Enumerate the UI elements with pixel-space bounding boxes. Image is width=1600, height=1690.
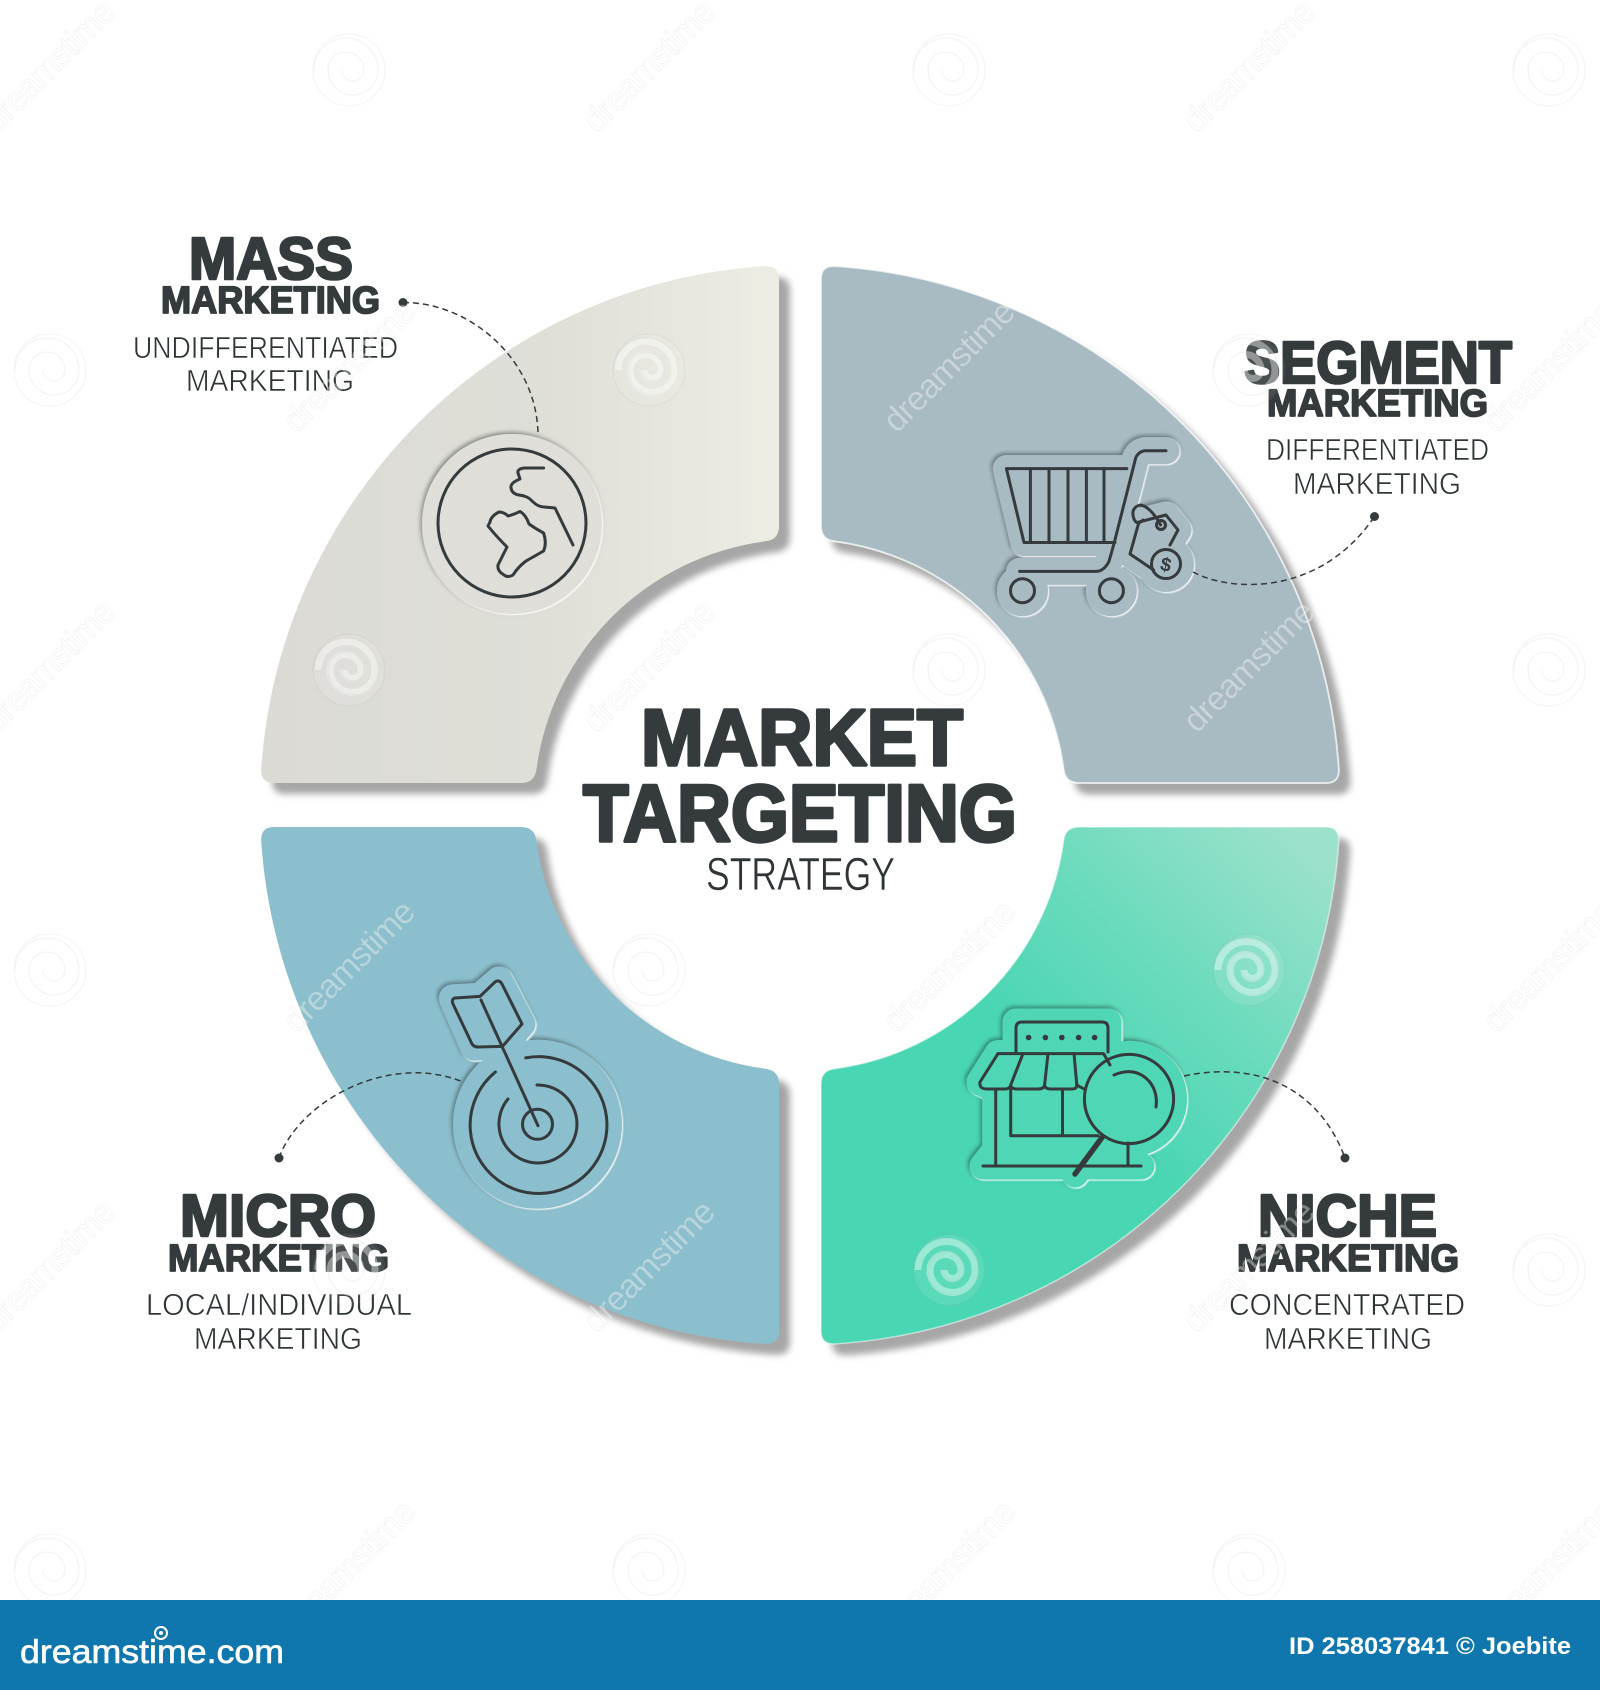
watermark: dreamstime text: dreamstime — [876, 893, 1023, 1040]
label: segment marketing: MARKETING — [1293, 466, 1461, 501]
title: market targeting strategy — [583, 693, 1017, 900]
watermark: dreamstime text: dreamstime — [1176, 593, 1323, 740]
label: mass marketing: UNDIFFERENTIATED — [133, 330, 398, 365]
panel: mass marketing quadrant — [261, 266, 779, 783]
label: segment marketing: MARKETING — [1267, 383, 1488, 425]
panel: segment marketing quadrant — [821, 266, 1339, 783]
connector: mass — [398, 298, 538, 436]
watermark: dreamstime text: dreamstime — [576, 593, 723, 740]
label: niche marketing: MARKETING — [1237, 1238, 1459, 1280]
icon text: dollar sign: $ — [1158, 554, 1173, 577]
label: micro marketing: LOCAL/INDIVIDUAL — [146, 1287, 412, 1322]
label: niche marketing: NICHE — [1258, 1183, 1437, 1249]
connector: micro — [274, 1073, 463, 1162]
watermark: dreamstime text: dreamstime — [1176, 1193, 1323, 1340]
label: segment marketing — [1244, 330, 1512, 501]
watermark: dreamstime text: dreamstime — [276, 293, 423, 440]
label: niche marketing: MARKETING — [1264, 1321, 1432, 1356]
label: micro marketing: MICRO — [180, 1183, 376, 1249]
label: mass marketing: MARKETING — [161, 280, 380, 322]
watermark: dreamstime text: dreamstime — [876, 293, 1023, 440]
label: mass marketing — [133, 226, 398, 398]
watermark: dreamstime text: dreamstime — [276, 1493, 423, 1640]
label: niche marketing: CONCENTRATED — [1229, 1287, 1465, 1322]
icon: dart and target — [452, 980, 608, 1195]
label: mass marketing: MARKETING — [186, 363, 354, 398]
panel: micro marketing quadrant — [261, 827, 779, 1344]
footer bar — [0, 1600, 1600, 1690]
label: micro marketing — [146, 1183, 412, 1356]
footer logo: dreamstime.com — [20, 1633, 284, 1670]
title: market targeting strategy: TARGETING — [583, 769, 1017, 859]
label: micro marketing: MARKETING — [194, 1321, 362, 1356]
watermark: dreamstime text: dreamstime — [276, 893, 423, 1040]
label: mass marketing: MASS — [189, 226, 353, 292]
label: segment marketing: DIFFERENTIATED — [1266, 432, 1489, 467]
watermark: dreamstime text: dreamstime — [576, 1193, 723, 1340]
title: market targeting strategy: STRATEGY — [706, 848, 895, 900]
connector: segment — [1193, 512, 1379, 584]
footer credit: ID 258037841 © Joebite — [1289, 1633, 1571, 1660]
icon: shopping cart with price tag — [1006, 451, 1180, 603]
label: micro marketing: MARKETING — [168, 1238, 389, 1280]
label: niche marketing — [1229, 1183, 1465, 1356]
watermark: dreamstime text: dreamstime — [876, 1493, 1023, 1640]
connector: niche — [1184, 1072, 1350, 1162]
label: segment marketing: SEGMENT — [1244, 330, 1512, 396]
icon: globe — [422, 434, 602, 614]
icon: storefront with magnifier — [980, 1022, 1174, 1174]
panel: niche marketing quadrant — [821, 827, 1339, 1344]
title: market targeting strategy: MARKET — [641, 693, 963, 782]
